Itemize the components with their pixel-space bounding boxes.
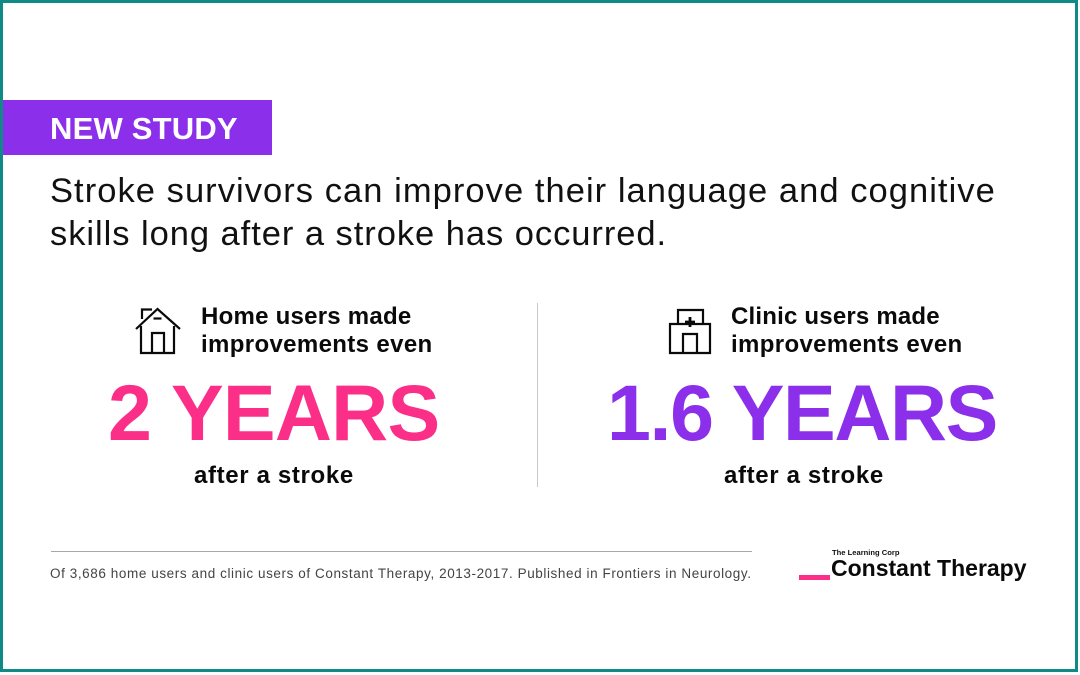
headline: Stroke survivors can improve their language and cognitive: [50, 172, 996, 210]
logo name: Constant Therapy: [831, 555, 1027, 581]
home heading: improvements even: [201, 331, 433, 358]
clinic caption: after a stroke: [724, 462, 884, 489]
clinic heading: [731, 303, 963, 358]
home heading: Home users made: [201, 303, 412, 330]
logo: Constant Therapy: [799, 548, 1027, 581]
home stat: 2 YEARS: [108, 368, 439, 457]
new study banner: [3, 100, 272, 155]
clinic heading: Clinic users made: [731, 303, 940, 330]
footnote: Of 3,686 home users and clinic users of Constant Therapy, 2013-2017. Published in Frontiers in Neurology.: [50, 566, 752, 581]
home caption: after a stroke: [194, 462, 354, 489]
headline: skills long after a stroke has occurred.: [50, 215, 667, 253]
clinic heading: improvements even: [731, 331, 963, 358]
divider: [537, 303, 538, 487]
icon: clinic: [668, 308, 712, 354]
banner label: NEW STUDY: [50, 111, 238, 146]
logo small text: The Learning Corp: [832, 548, 900, 557]
clinic stat: 1.6 YEARS: [607, 368, 997, 457]
home heading: [201, 303, 433, 358]
headline: [50, 172, 996, 253]
panel: clinic users: [607, 303, 997, 489]
footnote rule: [51, 551, 752, 552]
icon: house: [135, 308, 181, 354]
logo pink bar: [799, 575, 830, 580]
panel: home users: [108, 303, 439, 489]
